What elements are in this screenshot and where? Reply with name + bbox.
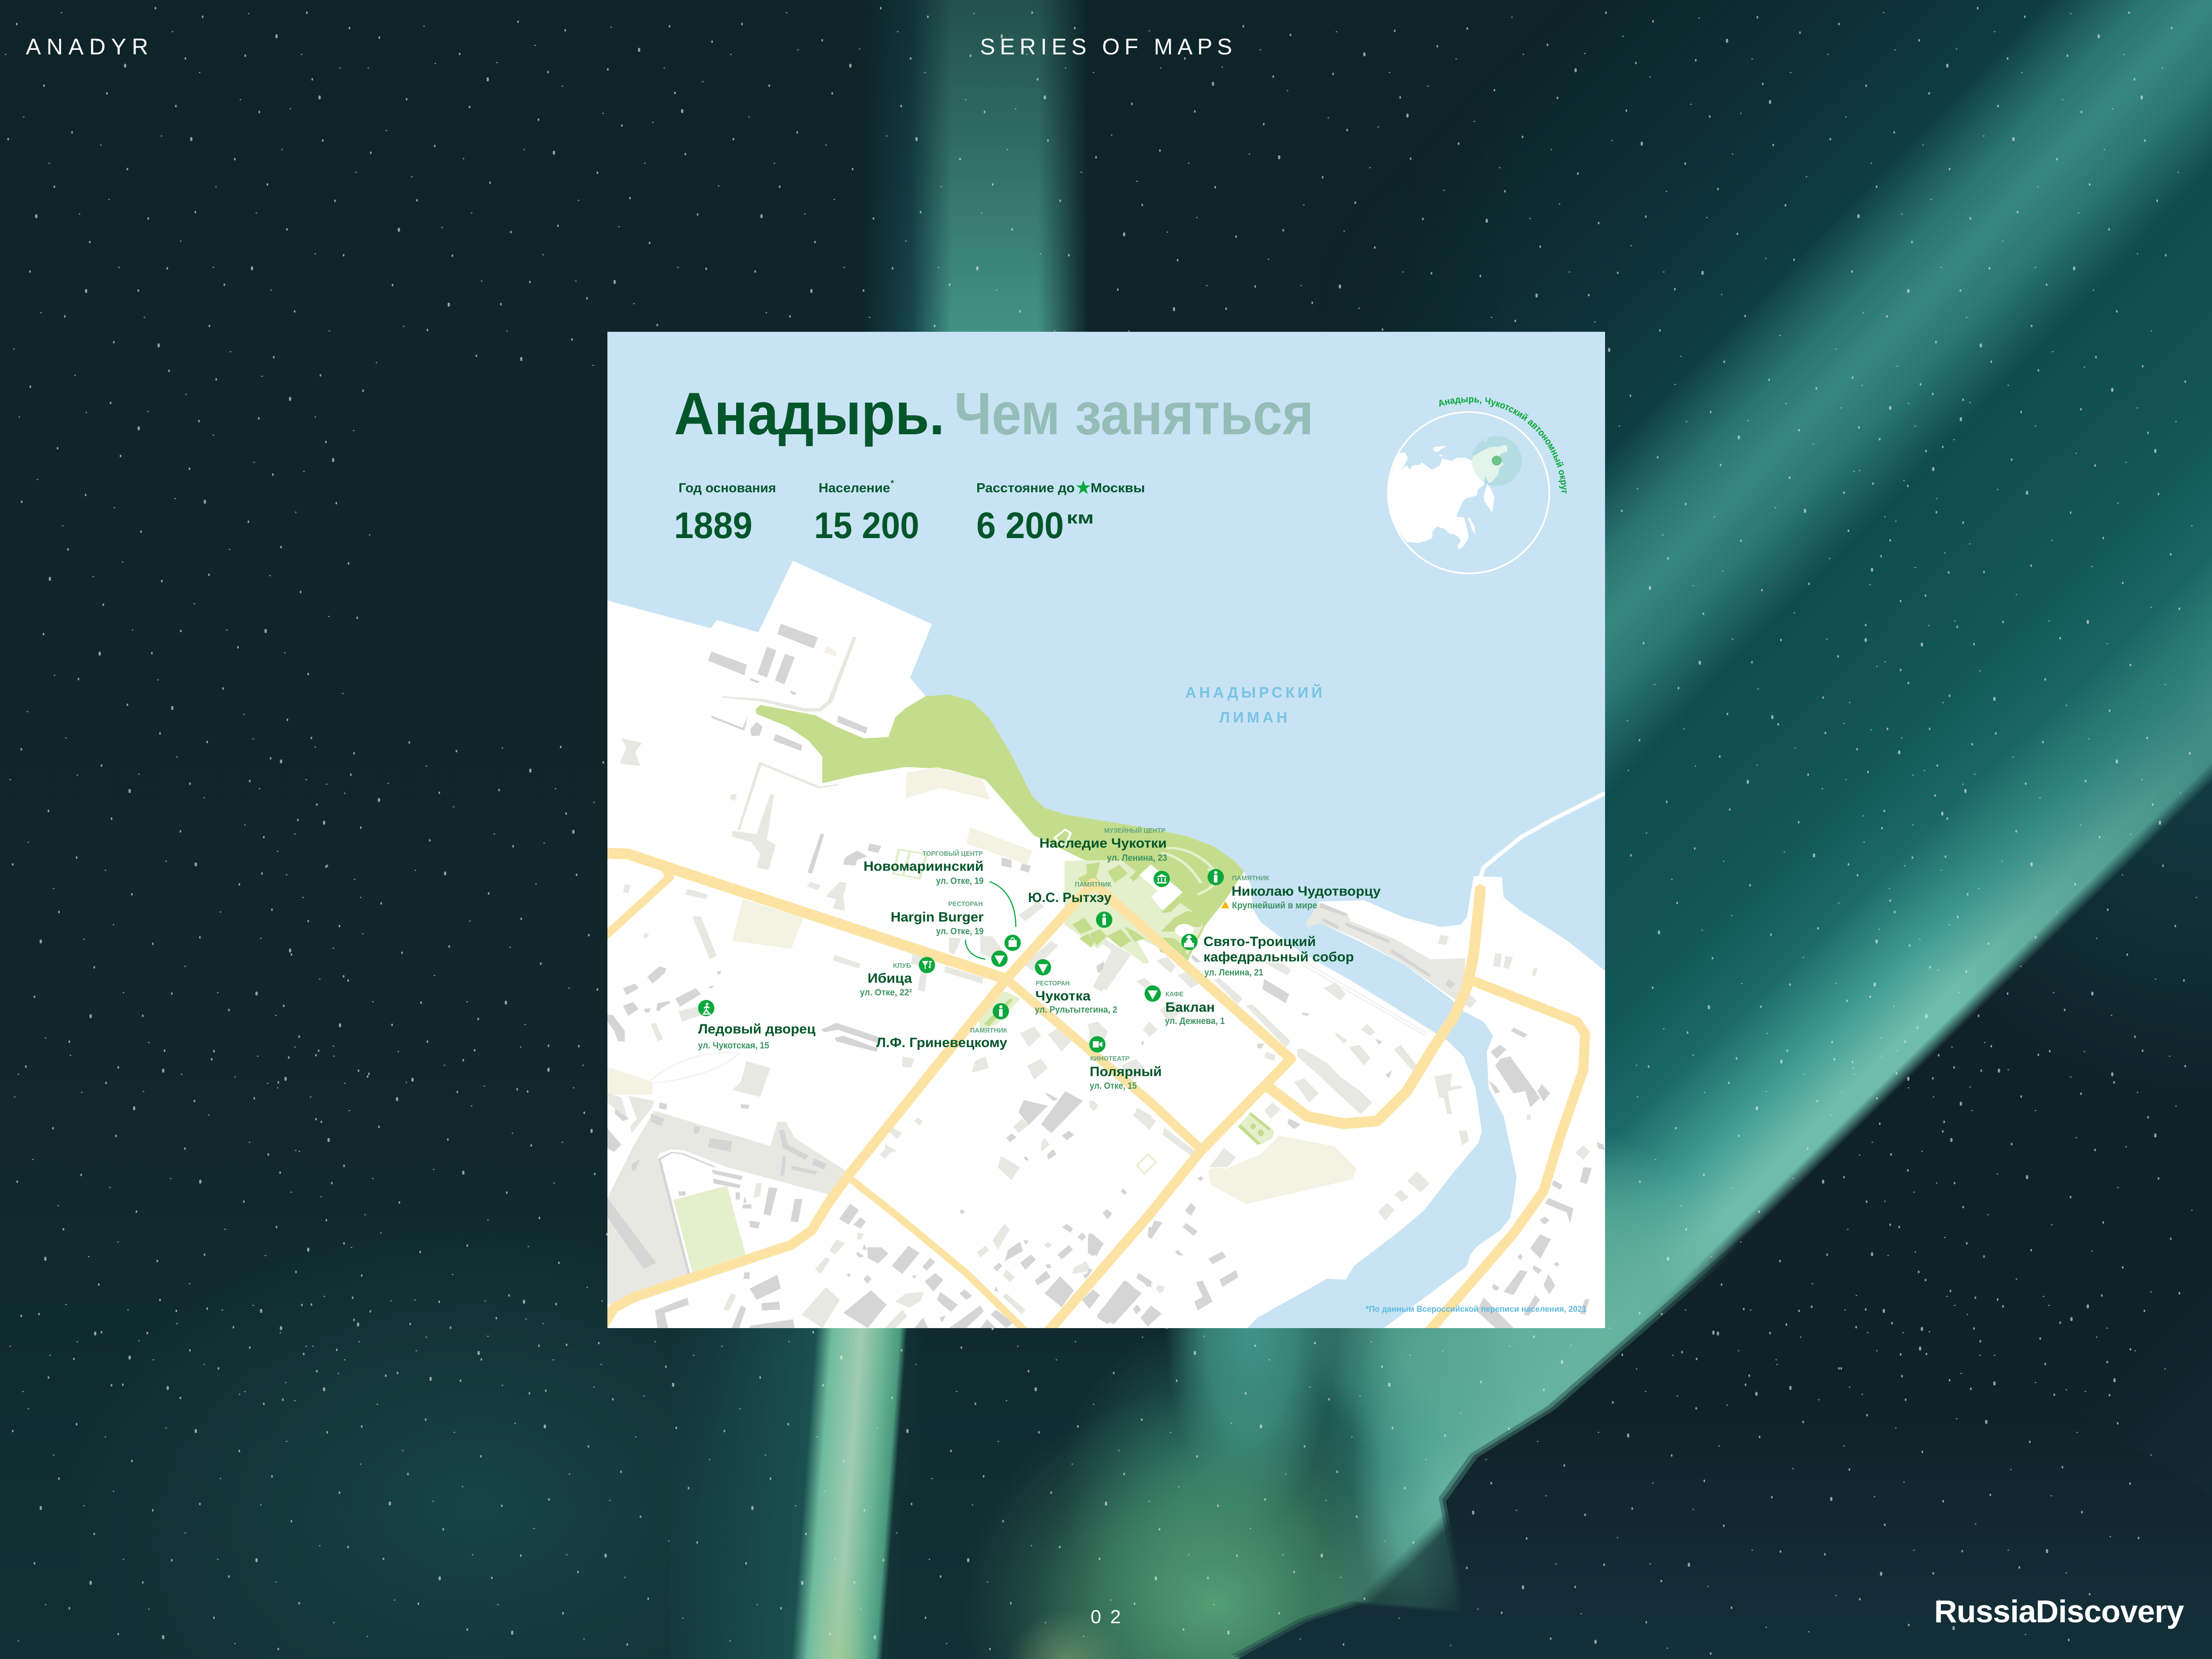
label: Ледовый дворец: ул. Чукотская, 15 bbox=[698, 1041, 769, 1051]
label: Наследие Чукотки: ул. Ленина, 23 bbox=[1107, 853, 1167, 863]
label: Ибица: КЛУБ bbox=[893, 962, 911, 970]
icon: cocktail bbox=[919, 957, 935, 973]
label: Новомариинский bbox=[863, 849, 984, 886]
label: Полярный bbox=[1090, 1055, 1162, 1091]
label: Полярный: Полярный bbox=[1090, 1064, 1162, 1079]
stat: founding year: Год основания bbox=[679, 481, 776, 495]
label: Ю.С. Рытхэу: ПАМЯТНИК bbox=[1075, 881, 1112, 888]
background: aurora sweep on the right bbox=[1335, 0, 2212, 1614]
icon: church bbox=[1181, 934, 1198, 950]
map: pier line bbox=[1480, 793, 1605, 877]
background: bright vertical streak bbox=[671, 1328, 929, 1659]
map: south-west zone and stadium bbox=[607, 1091, 1151, 1328]
label: Баклан bbox=[1165, 990, 1225, 1026]
label: Ледовый дворец: Ледовый дворец bbox=[698, 1022, 816, 1037]
label: Наследие Чукотки bbox=[1039, 826, 1167, 863]
stat: distance to Moscow bbox=[976, 480, 1145, 546]
map: central-west buildings bbox=[607, 828, 1131, 1108]
label: Баклан: Баклан bbox=[1165, 1000, 1215, 1015]
icon: pizza slice bbox=[991, 951, 1008, 967]
map: park lawns and paths bbox=[1065, 848, 1221, 964]
label: Николаю Чудотворцу bbox=[1221, 874, 1381, 911]
stat: distance to Moscow: 6 200 bbox=[976, 505, 1064, 546]
label: Л.Ф. Гриневецкому bbox=[876, 1027, 1008, 1050]
stat: population: Население bbox=[819, 481, 890, 495]
stat: distance to Moscow: Москвы bbox=[1091, 481, 1145, 495]
label: Свято-Троицкий кафедральный собор: Свято-Троицкий bbox=[1203, 934, 1316, 949]
label: Баклан: ул. Дежнева, 1 bbox=[1165, 1016, 1225, 1026]
logo: RussiaDiscovery: RussiaDiscovery bbox=[1934, 1594, 2184, 1629]
label: Ибица: ул. Отке, 22² bbox=[860, 988, 912, 998]
label: Николаю Чудотворцу: Николаю Чудотворцу bbox=[1232, 884, 1381, 899]
locator globe: Анадырь, Чукотский автономный округ bbox=[1437, 394, 1570, 494]
stat: population bbox=[814, 479, 919, 546]
map: memorial square lawns bbox=[984, 862, 1145, 1026]
label: Ибица: Ибица bbox=[868, 971, 912, 986]
locator globe bbox=[1388, 394, 1570, 573]
label: Hargin Burger: Hargin Burger bbox=[891, 910, 984, 925]
chart lines: leader lines to Hargin Burger and Novomariinsky bbox=[965, 882, 1016, 959]
map: water label bbox=[1185, 684, 1322, 726]
label: Ю.С. Рытхэу bbox=[1028, 881, 1112, 905]
stat: population: 15 200 bbox=[814, 505, 919, 546]
label: Hargin Burger: РЕСТОРАН bbox=[948, 900, 983, 908]
map: geography, buildings and roads bbox=[607, 332, 1605, 1328]
map: north-west buildings bbox=[620, 624, 1071, 870]
stat: founding year bbox=[674, 481, 776, 546]
label: Л.Ф. Гриневецкому: ПАМЯТНИК bbox=[970, 1027, 1008, 1034]
stat: founding year: 1889 bbox=[674, 505, 752, 546]
background: inner soft edge of dark sky bbox=[1234, 1255, 1727, 1657]
label: Чукотка bbox=[1035, 980, 1117, 1015]
stat: population: * bbox=[891, 479, 894, 488]
map: harbour spit and eastern buildings bbox=[1065, 848, 1550, 1114]
label: Свято-Троицкий кафедральный собор bbox=[1203, 934, 1354, 978]
icon: cafe bbox=[1145, 985, 1161, 1002]
map: river bbox=[1247, 999, 1517, 1328]
panel heading: title, stats and locator bbox=[607, 332, 1605, 649]
label: Полярный: КИНОТЕАТР bbox=[1090, 1055, 1130, 1062]
background: soft edge of dark sky bbox=[1230, 1223, 1758, 1655]
label: Баклан: КАФЕ bbox=[1165, 990, 1184, 998]
label: Николаю Чудотворцу: Крупнейший в мире bbox=[1232, 901, 1317, 911]
label: Hargin Burger bbox=[891, 900, 984, 936]
label: Чукотка: ул. Рультытегина, 2 bbox=[1035, 1005, 1117, 1015]
label: Новомариинский: ул. Отке, 19 bbox=[936, 876, 984, 886]
label: Свято-Троицкий кафедральный собор: ул. Ленина, 21 bbox=[1204, 968, 1263, 978]
page number: 02 bbox=[1091, 1606, 1130, 1627]
label: Чукотка: Чукотка bbox=[1035, 989, 1091, 1004]
stat: distance to Moscow: км bbox=[1067, 509, 1094, 528]
background: dark sky lower right bbox=[1237, 1264, 2018, 1659]
stat: distance to Moscow: Расстояние до bbox=[976, 481, 1075, 495]
icon: skater bbox=[698, 1000, 714, 1016]
map: icons and place labels bbox=[607, 332, 1605, 1328]
label: Новомариинский: Новомариинский bbox=[863, 859, 984, 874]
title: Анадырь. bbox=[674, 380, 945, 447]
label: Чукотка: РЕСТОРАН bbox=[1036, 980, 1070, 987]
map: south-east buildings and square bbox=[1088, 1100, 1605, 1328]
label: Полярный: ул. Отке, 15 bbox=[1090, 1081, 1137, 1091]
map: water label: ЛИМАН bbox=[1219, 709, 1287, 726]
map: roads bbox=[603, 853, 1585, 1333]
icon: monument bbox=[1208, 869, 1224, 885]
icon: monument bbox=[1096, 912, 1112, 928]
background: aurora column above the panel bbox=[861, 0, 1088, 363]
map: water label: АНАДЫРСКИЙ bbox=[1185, 684, 1322, 701]
header: city name: ANADYR bbox=[26, 34, 154, 59]
label: Новомариинский: ТОРГОВЫЙ ЦЕНТР bbox=[922, 849, 983, 858]
label: Ю.С. Рытхэу: Ю.С. Рытхэу bbox=[1028, 890, 1111, 905]
label: Ибица bbox=[860, 962, 912, 998]
footnote: *По данным Всероссийской переписи населения, 2021 bbox=[1366, 1305, 1586, 1314]
label: Николаю Чудотворцу: ПАМЯТНИК bbox=[1232, 874, 1270, 882]
map: coastal park bbox=[756, 694, 1244, 961]
icon: cinema camera bbox=[1089, 1036, 1106, 1053]
label: Наследие Чукотки: МУЗЕЙНЫЙ ЦЕНТР bbox=[1104, 826, 1165, 834]
map: land area bbox=[607, 561, 1605, 1328]
icon: monument bbox=[993, 1003, 1009, 1019]
icon: shopping bag bbox=[1004, 935, 1021, 951]
label: Наследие Чукотки: Наследие Чукотки bbox=[1039, 836, 1167, 851]
title bbox=[674, 380, 1314, 447]
label: Л.Ф. Гриневецкому: Л.Ф. Гриневецкому bbox=[876, 1035, 1007, 1050]
label: Свято-Троицкий кафедральный собор: кафедральный собор bbox=[1203, 950, 1354, 965]
icon: museum bbox=[1154, 871, 1170, 887]
panel: map card bbox=[607, 332, 1605, 1328]
header: series title: SERIES OF MAPS bbox=[980, 34, 1237, 59]
icon: pizza slice bbox=[1035, 959, 1051, 975]
title: Чем заняться bbox=[954, 380, 1314, 447]
label: Hargin Burger: ул. Отке, 19 bbox=[936, 927, 984, 936]
label: Ледовый дворец bbox=[698, 1022, 816, 1051]
